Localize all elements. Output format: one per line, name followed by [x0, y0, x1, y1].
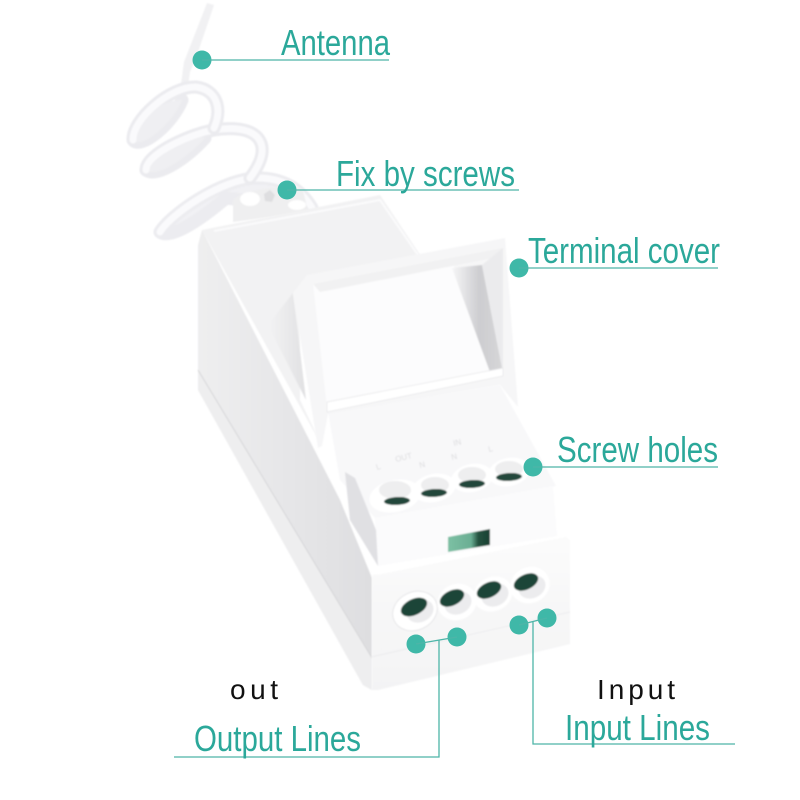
callout: terminal cover [510, 230, 720, 278]
terminal markings: N [450, 452, 458, 462]
callout: antenna: Antenna [281, 22, 391, 63]
callout: fix by screws [278, 153, 519, 200]
callout: terminal cover: Terminal cover [528, 230, 720, 271]
label: input: Input [597, 674, 675, 705]
top face inner edge [214, 200, 420, 258]
coil upper [133, 87, 218, 142]
callout: screw holes [524, 429, 718, 476]
block front [375, 486, 557, 566]
terminal markings [375, 437, 494, 472]
cover outer shell [293, 238, 518, 448]
terminal markings: L [487, 444, 494, 454]
terminal block [328, 385, 557, 566]
callout: input lines: Input Lines [565, 707, 710, 748]
body top face [202, 195, 425, 446]
callout: output lines [174, 628, 466, 759]
terminal markings: IN [452, 437, 462, 448]
lower screw holes [386, 560, 556, 638]
terminal markings: N [418, 460, 426, 470]
front face [371, 537, 570, 690]
body left side [198, 230, 372, 690]
mounting tab with screw holes [233, 187, 308, 222]
callout: fix by screws: Fix by screws [336, 153, 515, 194]
terminal cover [293, 238, 518, 448]
label: out: out [230, 674, 278, 705]
terminal markings: OUT [394, 451, 413, 464]
device body [198, 195, 425, 690]
cover rim [313, 248, 503, 292]
coil middle [146, 129, 262, 178]
green indicator window [448, 529, 490, 552]
body seam [198, 370, 372, 658]
cover inner shaded wall [452, 265, 502, 372]
cover right wall [482, 248, 503, 370]
callout: antenna [192, 22, 391, 70]
lower band [198, 370, 372, 690]
block top surface [328, 385, 556, 518]
front seam [371, 612, 570, 657]
cover lip [327, 368, 503, 412]
callout: output lines: Output Lines [194, 718, 361, 759]
callout: screw holes: Screw holes [557, 429, 718, 470]
callout: input lines [510, 608, 735, 748]
block left shadow [345, 472, 378, 566]
cover inner panel [313, 262, 503, 408]
antenna wire [133, 3, 312, 234]
coil lower [160, 178, 312, 234]
antenna tip [181, 3, 214, 86]
slope shadow [268, 293, 306, 400]
terminal markings: L [375, 462, 382, 472]
upper screw holes [366, 454, 532, 517]
